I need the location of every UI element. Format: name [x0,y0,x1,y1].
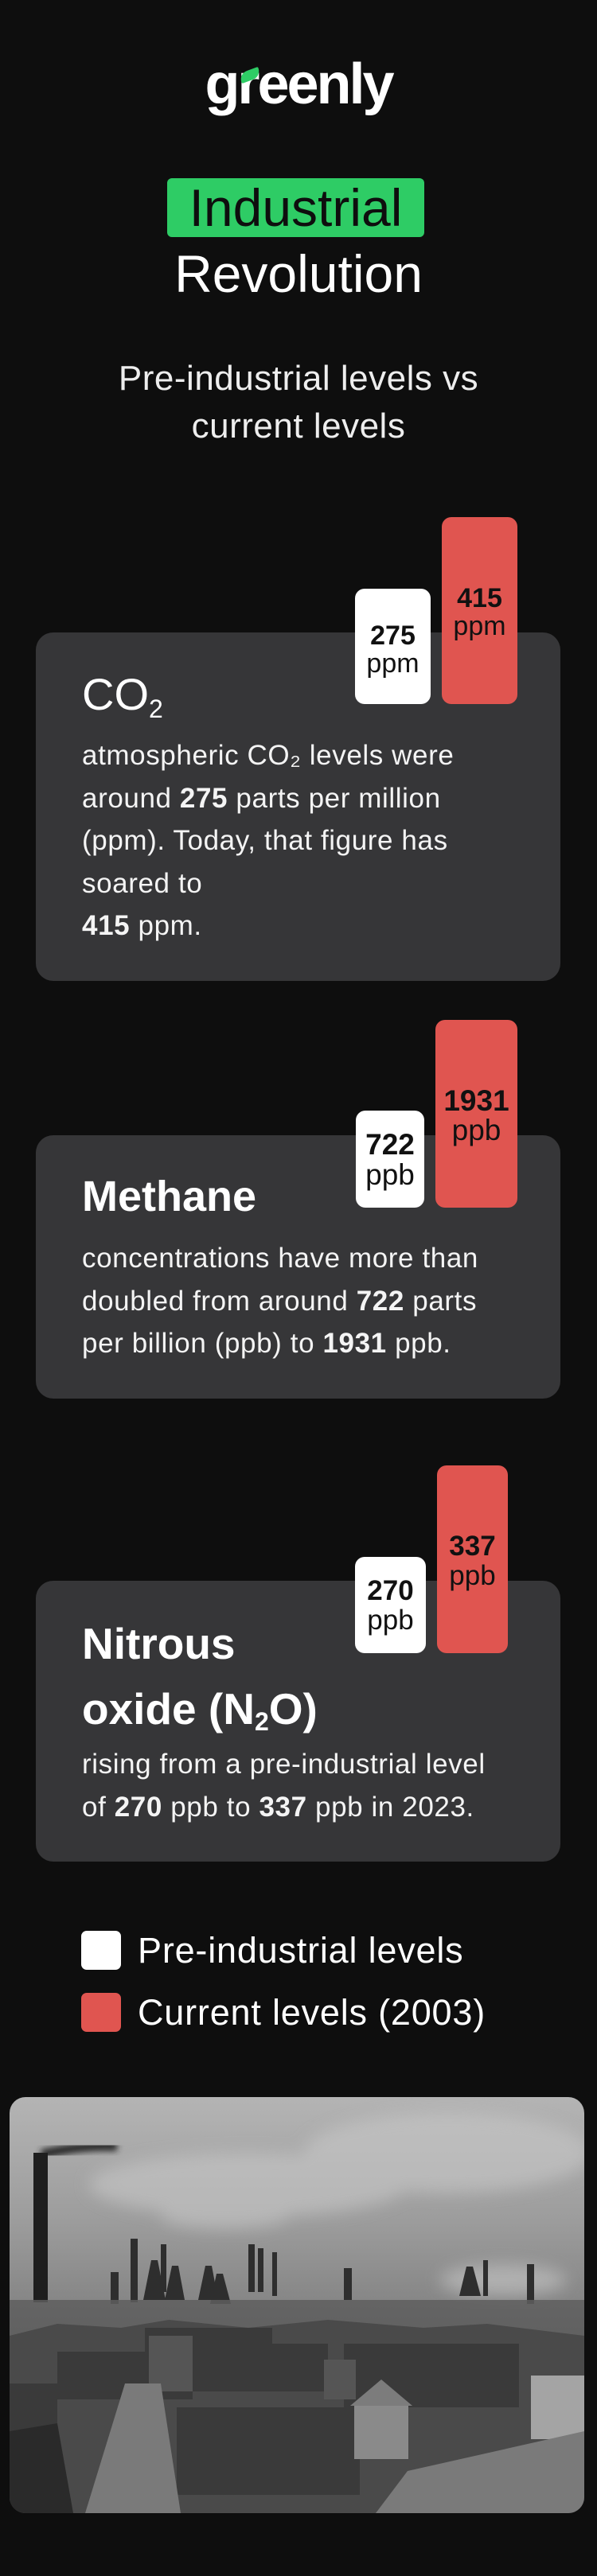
heading: Nitrous [82,1619,236,1668]
bar: CO2 pre-industrial: 275 [370,621,416,651]
body [82,1749,486,1822]
photo: industrial city [10,2097,584,2513]
bar: N2O current: 337 [449,1531,496,1562]
subtitle: current levels [192,407,405,446]
body: (ppm). Today, that figure has [82,825,448,856]
logo: greenly [205,53,392,116]
legend item: current: Current levels (2003) [138,1992,486,2033]
heading: oxide (N2O) [82,1684,318,1736]
bar: methane pre-industrial [356,1111,424,1208]
body: 415 ppm. [82,910,202,941]
panel: methane [36,1135,560,1399]
body: atmospheric CO₂ levels were [82,740,454,771]
bar: CO2 pre-industrial [355,589,431,704]
body: rising from a pre-industrial level [82,1749,486,1780]
bar: CO2 pre-industrial: ppm [366,648,419,679]
body: concentrations have more than [82,1243,478,1274]
legend [81,1930,486,2033]
heading [82,1619,318,1736]
bar: methane current [435,1020,517,1208]
bar: methane current: 1931 [443,1084,509,1117]
body: doubled from around 722 parts [82,1286,477,1316]
body: soared to [82,867,202,899]
bar: N2O pre-industrial [355,1557,426,1653]
body: around 275 parts per million [82,783,441,813]
subtitle [119,359,478,446]
body [82,1243,478,1359]
panel: CO2 [36,632,560,981]
bar: methane current: ppb [452,1114,501,1146]
church [354,2403,408,2459]
body [82,740,454,941]
title: Revolution [174,244,423,303]
body: per billion (ppb) to 1931 ppb. [82,1328,451,1359]
heading: CO2 [82,669,163,723]
title highlight: Industrial [189,178,402,237]
panel: nitrous oxide [36,1581,560,1862]
bar: CO2 current: ppm [453,611,506,641]
heading: Methane [82,1173,256,1220]
bar: N2O current [437,1465,508,1653]
bar: methane pre-industrial: ppb [365,1158,415,1191]
legend item: pre-industrial: Pre-industrial levels [138,1930,463,1971]
bar: CO2 current [442,517,517,704]
icon: leaf [239,67,261,84]
body: of 270 ppb to 337 ppb in 2023. [82,1792,474,1822]
tall chimney [33,2153,48,2302]
bar: CO2 current: 415 [457,583,502,613]
bar: N2O pre-industrial: 270 [367,1575,414,1606]
bar: N2O current: ppb [449,1560,496,1591]
subtitle: Pre-industrial levels vs [119,359,478,398]
bar: N2O pre-industrial: ppb [367,1605,414,1636]
street [85,2383,181,2513]
smoke plume [41,2146,117,2154]
bar: methane pre-industrial: 722 [365,1128,415,1161]
bright building [531,2376,584,2439]
